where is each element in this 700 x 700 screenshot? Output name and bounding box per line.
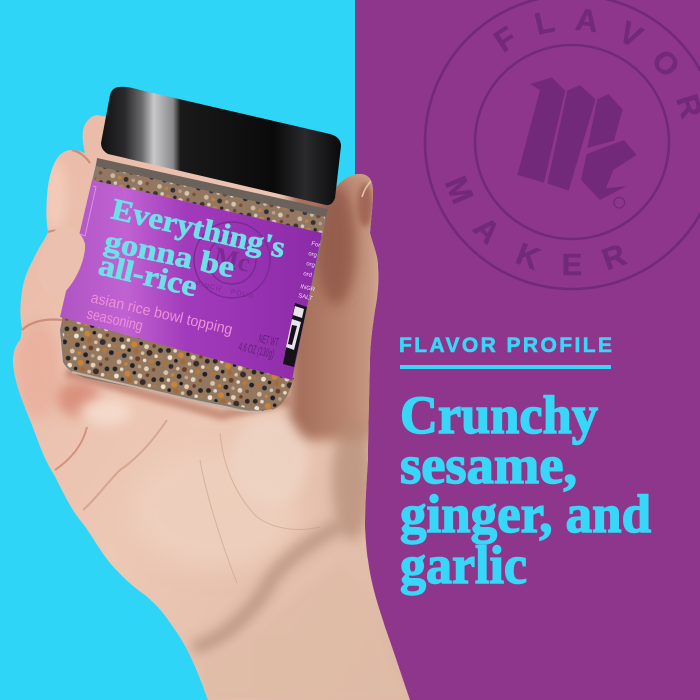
- heading rule: [400, 365, 611, 369]
- seal text: MAKER: A: [467, 210, 507, 250]
- palm folds: [55, 427, 87, 470]
- label title: Everything's: [108, 193, 288, 265]
- side flap outline: [80, 186, 96, 236]
- thumb and thenar shading: [290, 170, 382, 440]
- seal text: FLAVOR: V: [613, 14, 648, 55]
- label title: gonna be: [102, 225, 238, 284]
- finger tip tints: [16, 322, 60, 418]
- hand holding jar: [13, 115, 410, 700]
- flavor description: garlic: [400, 535, 527, 595]
- side panel text: INGR: [300, 284, 316, 293]
- shadow and highlight below jar: [66, 372, 290, 415]
- label title: all-rice: [95, 249, 200, 303]
- label subtitle: seasoning: [85, 305, 144, 335]
- flavor description: sesame,: [400, 435, 577, 495]
- side panel text: SALT: [298, 293, 313, 302]
- label seal: [194, 222, 270, 301]
- wrist crease: [193, 525, 340, 648]
- left cyan background: [0, 0, 356, 700]
- seal text: FLAVOR: A: [574, 2, 600, 39]
- side panel text: For: [311, 241, 321, 249]
- side panel text: ord: [303, 271, 312, 279]
- side panel text: org: [306, 261, 315, 269]
- jar body: [60, 160, 327, 412]
- watermark: McCormick Flavor Maker seal: [425, 0, 700, 289]
- seal text: FLAVOR: [488, 2, 700, 122]
- palm light areas: [148, 463, 295, 564]
- label title: [95, 193, 288, 303]
- product label: [60, 180, 322, 380]
- jar cap: [101, 87, 341, 205]
- right purple panel: [355, 0, 700, 700]
- label seal: Mc: [211, 241, 253, 278]
- jar base sheen: [72, 372, 272, 412]
- seal text: MAKER: [438, 171, 630, 282]
- recycling badge: [283, 303, 307, 367]
- flavor description: Crunchy: [400, 385, 598, 445]
- label seal: PINCH · POUR: [195, 281, 255, 301]
- right palm edge shadow: [332, 420, 372, 540]
- seasoning top band: [94, 166, 325, 240]
- seal text: FLAVOR: F: [488, 19, 523, 59]
- seal text: MAKER: R: [597, 237, 630, 277]
- seal text: MAKER: E: [562, 247, 582, 282]
- clear plastic rim: [96, 158, 328, 217]
- seal text: MAKER: K: [511, 236, 545, 277]
- net weight: 4.6 OZ (130g): [237, 339, 276, 361]
- side panel text: org: [308, 251, 317, 259]
- spice jar: [38, 87, 341, 412]
- side panel text: [298, 241, 321, 302]
- seal text: MAKER: M: [438, 171, 480, 209]
- seasoning bottom band: [62, 316, 294, 411]
- net weight: [237, 331, 280, 361]
- seal text: FLAVOR: O: [645, 43, 687, 84]
- heading: flavor profile: FLAVOR PROFILE: [399, 334, 612, 357]
- product label: NET WT: [257, 331, 280, 349]
- seal monogram: [517, 77, 637, 208]
- finger gaps: [22, 150, 90, 330]
- label subtitle: asian rice bowl topping: [89, 289, 234, 339]
- flavor description: [400, 385, 651, 595]
- ring finger tip over label: [38, 227, 85, 296]
- flavor description: ginger, and: [400, 484, 651, 544]
- seal text: FLAVOR: L: [531, 3, 558, 42]
- wrist tone: [203, 687, 409, 700]
